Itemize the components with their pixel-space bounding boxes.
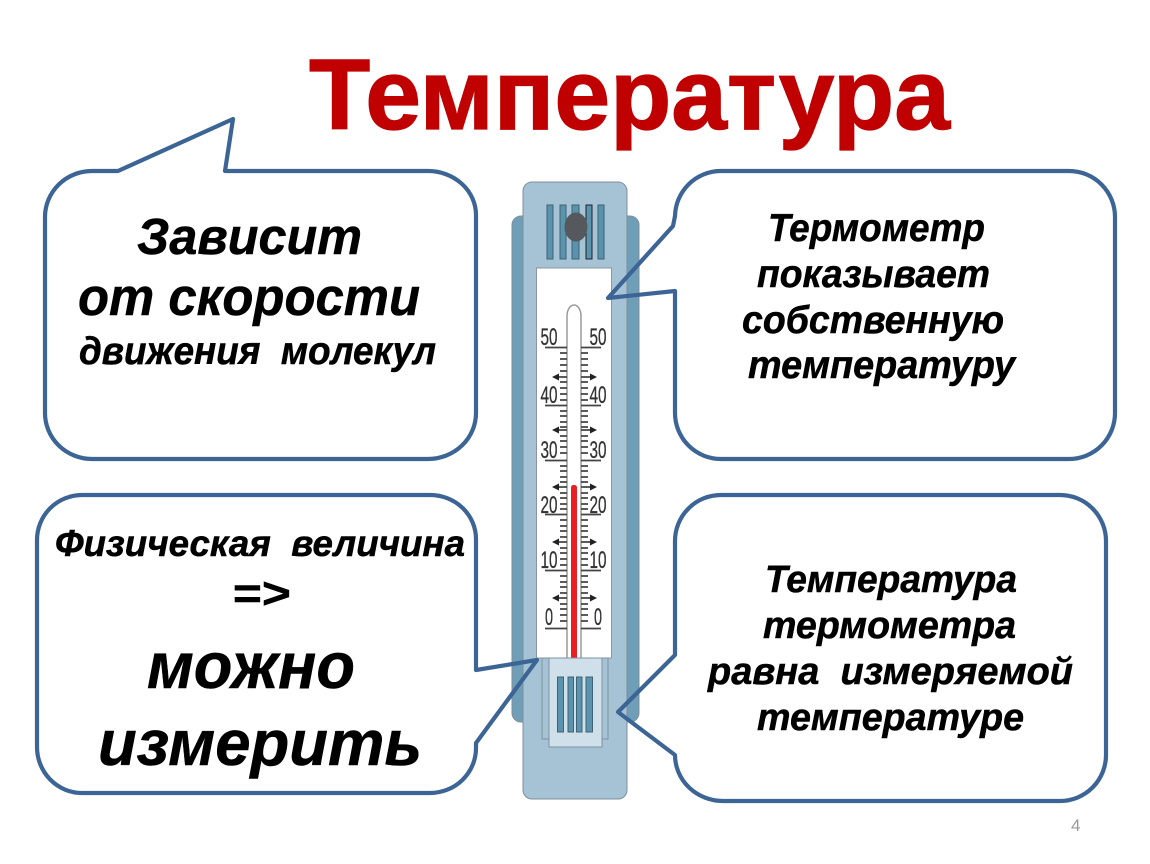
icon: wall thermometer: 0 (594, 604, 602, 631)
panel: depends on molecular speed (45, 119, 476, 459)
panel: thermometer shows its own temperature: Термометр (768, 207, 985, 250)
title: Температура (309, 39, 951, 151)
panel: thermometer temperature equals measured temperature: равна измеряемой (707, 651, 1073, 693)
panel: thermometer shows its own temperature: собственную (742, 299, 1004, 342)
icon: wall thermometer: 50 (540, 324, 558, 351)
panel: thermometer temperature equals measured temperature: температуре (757, 697, 1024, 739)
panel: thermometer shows its own temperature (608, 171, 1115, 459)
icon: wall thermometer: 10 (540, 547, 558, 574)
page number: 4 (1071, 816, 1080, 835)
panel: thermometer temperature equals measured temperature (618, 495, 1106, 801)
panel: thermometer temperature equals measured temperature: термометра (763, 605, 1016, 647)
panel: thermometer shows its own temperature: температуру (748, 344, 1017, 387)
panel: physical quantity can be measured: => (232, 569, 290, 618)
panel: depends on molecular speed: Зависит (137, 208, 362, 265)
icon: wall thermometer: 40 (540, 382, 558, 409)
icon: wall thermometer: 50 (590, 324, 606, 351)
panel: thermometer shows its own temperature: показывает (757, 253, 990, 296)
icon: wall thermometer: 30 (540, 437, 558, 464)
panel: physical quantity can be measured: Физическая величина (55, 523, 465, 564)
icon: wall thermometer: 10 (590, 547, 606, 574)
panel: physical quantity can be measured (37, 495, 537, 793)
icon: wall thermometer: 20 (590, 492, 606, 519)
icon: wall thermometer: 20 (540, 492, 558, 519)
panel: depends on molecular speed: от скорости (78, 268, 420, 327)
panel: depends on molecular speed: движения молекул (79, 330, 436, 373)
panel: thermometer temperature equals measured temperature: Температура (765, 559, 1017, 601)
icon: wall thermometer (512, 182, 639, 799)
icon: wall thermometer: 30 (590, 437, 606, 464)
panel: physical quantity can be measured: измерить (98, 707, 422, 779)
icon: wall thermometer: 0 (545, 604, 553, 631)
panel: physical quantity can be measured: можно (147, 629, 355, 702)
icon: wall thermometer: 40 (590, 382, 606, 409)
